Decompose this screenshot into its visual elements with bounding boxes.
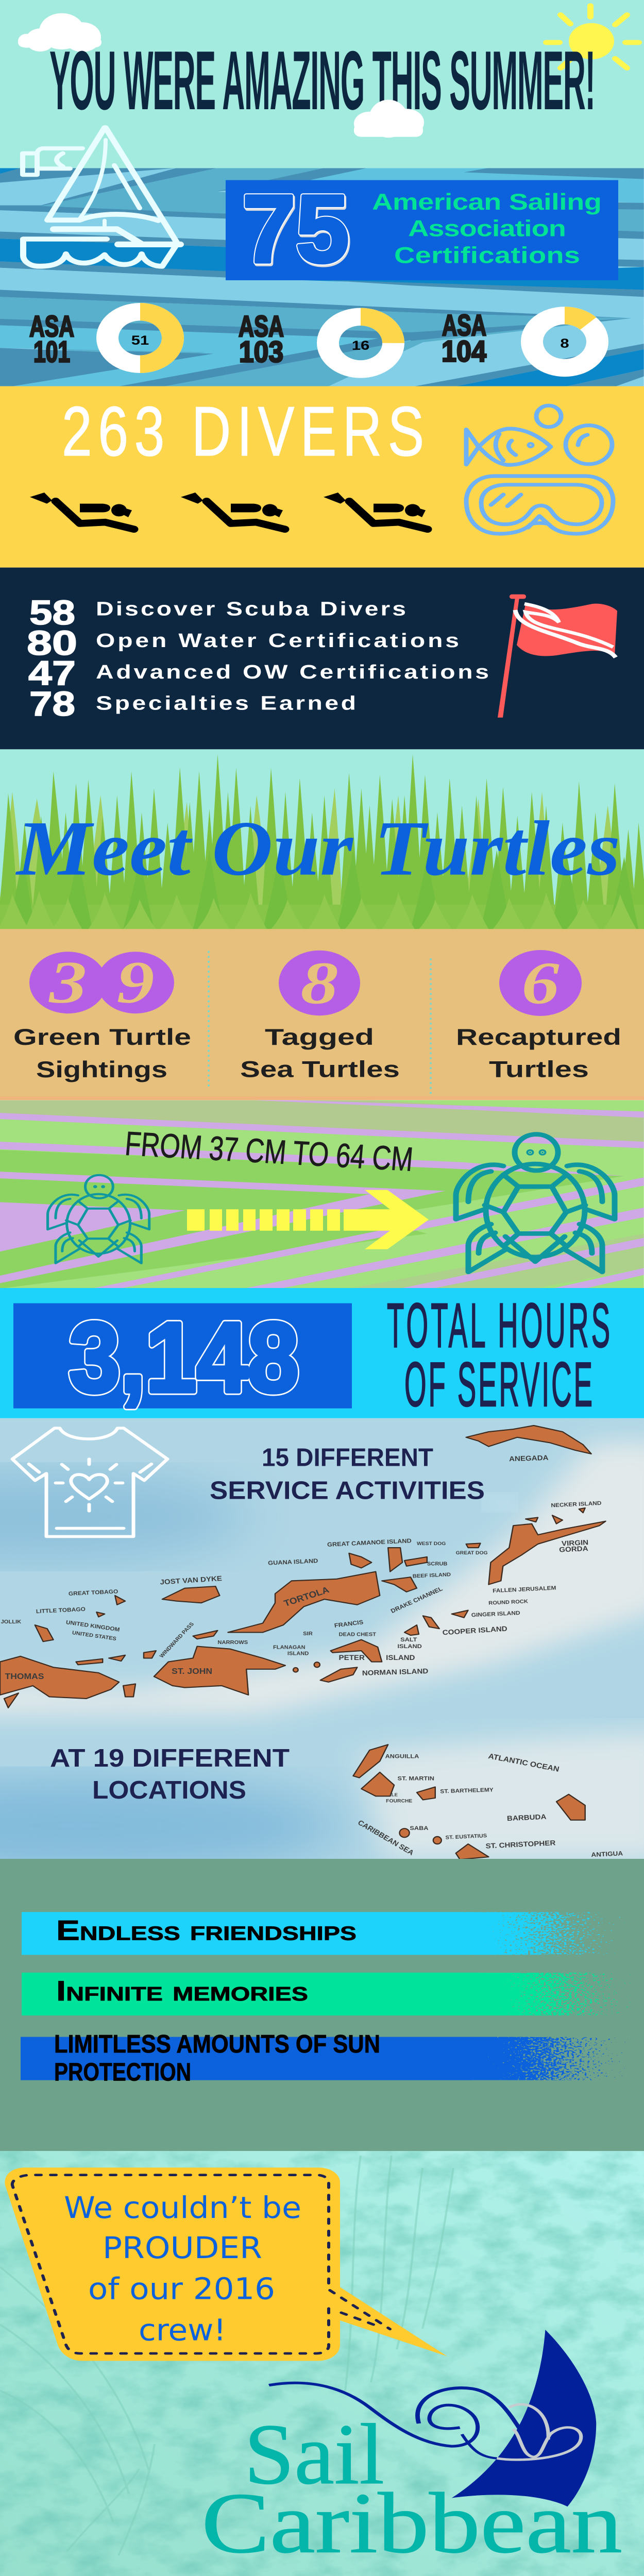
map labels: GUANA ISLAND	[268, 1557, 318, 1566]
stat: 8 tagged: Tagged	[265, 1024, 374, 1050]
stat: 3,148: 3,148	[69, 1302, 299, 1413]
callout text	[64, 2191, 301, 2348]
ASA 103 stat: 103	[239, 335, 283, 368]
stat: 39 sightings: 9	[117, 948, 154, 1015]
map labels: GREAT CAMANOE ISLAND	[327, 1537, 412, 1548]
locations label: AT 19 DIFFERENT	[50, 1743, 290, 1772]
size range label: FROM 37 CM TO 64 CM	[124, 1125, 415, 1178]
bar: infinite memories	[22, 1973, 639, 2015]
bar: limitless sun protection: PROTECTION	[54, 2057, 191, 2086]
stat numbers	[27, 594, 77, 723]
panel: ASA certifications	[226, 175, 618, 284]
map labels: VIRGIN	[562, 1539, 589, 1548]
map labels: UNITED KINGDOM	[65, 1620, 120, 1633]
map labels: PETER	[339, 1654, 365, 1662]
label: total hours of service	[387, 1291, 610, 1419]
stat: 3,148: 3,148	[69, 1302, 299, 1413]
bar: infinite memories: Infinite memories	[56, 1976, 308, 2007]
ASA 101 stat: 101	[33, 335, 70, 368]
stat labels: Advanced OW Certifications	[96, 661, 489, 683]
bar: limitless sun protection: LIMITLESS AMOUNTS OF SUN	[54, 2029, 380, 2058]
stat: 8 tagged	[240, 950, 400, 1082]
service activities label: 15 DIFFERENT	[262, 1443, 433, 1471]
bar: endless friendships: Endless friendships	[56, 1915, 357, 1946]
map labels: FALLEN JERUSALEM	[493, 1585, 556, 1594]
map labels: SCRUB	[427, 1561, 448, 1567]
stat: 8 tagged: 8	[301, 950, 338, 1016]
map labels: JOST VAN DYKE	[160, 1575, 223, 1586]
service activities label: SERVICE ACTIVITIES	[210, 1476, 485, 1504]
certification label: Certifications	[394, 242, 580, 268]
map labels: NECKER ISLAND	[551, 1500, 602, 1509]
stat labels	[96, 598, 489, 714]
panel: meet our turtles background	[0, 749, 644, 929]
map labels: SABA	[410, 1825, 429, 1832]
map labels: SALT	[400, 1636, 417, 1643]
icon: large turtle	[456, 1134, 615, 1272]
map labels: JOLLIK	[1, 1619, 22, 1625]
icon: diver 2	[181, 493, 285, 529]
stat: 6 recaptured	[456, 950, 621, 1082]
big number 75: 75	[242, 175, 349, 283]
service activities label	[210, 1449, 484, 1499]
ASA 101 stat	[29, 310, 173, 368]
icon: t-shirt with heart	[12, 1428, 167, 1536]
locations label: LOCATIONS	[92, 1775, 246, 1804]
icon: dive flag	[498, 595, 617, 718]
icon: fish and bubbles	[466, 405, 612, 465]
icon: sun	[546, 6, 639, 68]
sky background	[0, 0, 644, 168]
panel: turtle stats	[0, 929, 644, 1100]
icon: diver 1	[30, 493, 134, 529]
stat: 39 sightings: Sightings	[36, 1057, 167, 1082]
stat numbers: 47	[28, 654, 76, 693]
callout text: of our 2016	[88, 2272, 275, 2307]
panel: dive certifications	[0, 568, 644, 749]
icon: small turtle	[48, 1175, 149, 1263]
map labels: ATLANTIC OCEAN	[487, 1752, 560, 1774]
big number 75: 75	[243, 176, 350, 284]
ASA 101 stat: 51	[131, 333, 149, 347]
map labels: ST. MARTIN	[397, 1775, 434, 1782]
map labels: FRANCIS	[334, 1619, 364, 1629]
panel: service hours	[0, 1288, 644, 1419]
ASA 104 stat	[442, 309, 598, 368]
map labels: ANTIGUA	[591, 1850, 623, 1858]
panel: map	[0, 1418, 644, 1875]
map labels: DEAD CHEST	[339, 1632, 377, 1637]
map labels: SIR	[303, 1631, 313, 1637]
bar: endless friendships	[22, 1912, 629, 1955]
logo sail and swirl	[269, 2330, 596, 2506]
map labels: GINGER ISLAND	[471, 1610, 520, 1618]
map labels: FOURCHE	[386, 1799, 413, 1804]
icon: cloud center	[354, 100, 424, 138]
stat: 8 tagged: Sea Turtles	[240, 1056, 400, 1082]
certification label	[372, 189, 602, 268]
panel: divers	[0, 386, 644, 568]
stat: 39 sightings: Green Turtle	[13, 1024, 191, 1050]
map labels: NARROWS	[217, 1640, 248, 1646]
map labels: ST. EUSTATIUS	[445, 1833, 487, 1841]
callout text: PROUDER	[103, 2231, 262, 2265]
map labels: ISLAND	[397, 1643, 422, 1650]
ASA 104 stat: 104	[442, 334, 486, 368]
ASA 104 stat: 8	[560, 336, 569, 351]
locations label	[50, 1749, 290, 1799]
title: YOU WERE AMAZING THIS SUMMER!	[49, 33, 596, 127]
callout: proud speech bubble	[5, 2167, 447, 2361]
ASA 103 stat	[239, 310, 394, 369]
logo wordmark	[201, 2407, 622, 2571]
icon: sailboat	[23, 128, 180, 266]
stat numbers: 58	[29, 594, 75, 632]
ASA 104 stat: ASA	[442, 309, 486, 342]
label: total hours of service: TOTAL HOURS	[387, 1291, 610, 1360]
map labels: TORTOLA	[282, 1585, 331, 1608]
stat labels: Discover Scuba Divers	[96, 598, 406, 620]
logo wordmark: Caribbean	[201, 2476, 622, 2571]
map labels: ISLAND	[386, 1654, 415, 1662]
map labels: ROUND ROCK	[488, 1599, 529, 1606]
map labels: ANEGADA	[509, 1454, 549, 1463]
stat: 6 recaptured: Recaptured	[456, 1024, 621, 1050]
certification label: Association	[408, 215, 566, 241]
panel: reef background	[0, 2151, 644, 2576]
map labels: CARIBBEAN SEA	[356, 1819, 415, 1857]
map labels: BEEF ISLAND	[412, 1572, 451, 1579]
bar: limitless sun protection	[21, 2029, 631, 2086]
stat: 39 sightings	[13, 948, 191, 1082]
certification label: American Sailing	[372, 189, 602, 215]
map labels: BARBUDA	[507, 1813, 547, 1823]
map labels: DRAKE CHANNEL	[389, 1585, 444, 1615]
stat: 6 recaptured: 6	[522, 950, 560, 1016]
stat: 39 sightings: 3	[48, 948, 87, 1015]
map labels: WINDWARD PASS	[159, 1621, 195, 1659]
logo: Sail Caribbean	[201, 2330, 622, 2571]
stat numbers: 80	[27, 624, 77, 663]
map labels: ST. JOHN	[172, 1667, 212, 1676]
map labels: ISLAND	[287, 1651, 309, 1657]
icon: cloud left	[18, 13, 101, 52]
map labels: ST. CHRISTOPHER	[485, 1839, 556, 1851]
sailing section: wave background	[0, 165, 644, 387]
panel: takeaways	[0, 1859, 644, 2151]
map labels: GREAT DOG	[456, 1550, 488, 1556]
map labels	[1, 1454, 623, 1858]
stat numbers: 78	[29, 685, 75, 723]
map labels: WEST DOG	[417, 1541, 446, 1547]
ASA 103 stat: 16	[352, 338, 369, 353]
map labels: ILE	[390, 1792, 398, 1797]
map labels: GORDA	[559, 1545, 588, 1554]
callout text: We couldn’t be	[64, 2191, 301, 2225]
map labels: FLANAGAN	[273, 1645, 306, 1650]
callout text: crew!	[139, 2313, 226, 2348]
logo wordmark: Sail	[244, 2407, 384, 2502]
arrow: growth	[187, 1190, 429, 1249]
big number 75: 75	[242, 175, 349, 283]
seagrass	[0, 754, 644, 929]
map labels: GREAT TOBAGO	[69, 1589, 118, 1597]
map labels: THOMAS	[5, 1672, 44, 1681]
stat labels: Open Water Certifications	[96, 630, 459, 652]
label: total hours of service: OF SERVICE	[404, 1349, 592, 1419]
map labels: UNITED STATES	[72, 1630, 117, 1642]
map labels: NORMAN ISLAND	[362, 1668, 429, 1677]
panel: turtle growth background	[0, 1100, 644, 1289]
map labels: COOPER ISLAND	[442, 1625, 507, 1637]
ASA 103 stat: ASA	[239, 310, 284, 343]
stat: 6 recaptured: Turtles	[489, 1056, 589, 1082]
icon: diver 3	[324, 493, 428, 529]
map islands	[0, 1426, 623, 1859]
map labels: ST. BARTHELEMY	[440, 1787, 494, 1794]
stat labels: Specialties Earned	[96, 692, 356, 714]
icon: dive mask	[466, 476, 613, 534]
ASA 101 stat: ASA	[29, 310, 74, 343]
heading: 263 divers: 263 DIVERS	[62, 392, 424, 470]
map labels: ANGUILLA	[385, 1753, 419, 1760]
map labels: LITTLE TOBAGO	[36, 1606, 86, 1615]
